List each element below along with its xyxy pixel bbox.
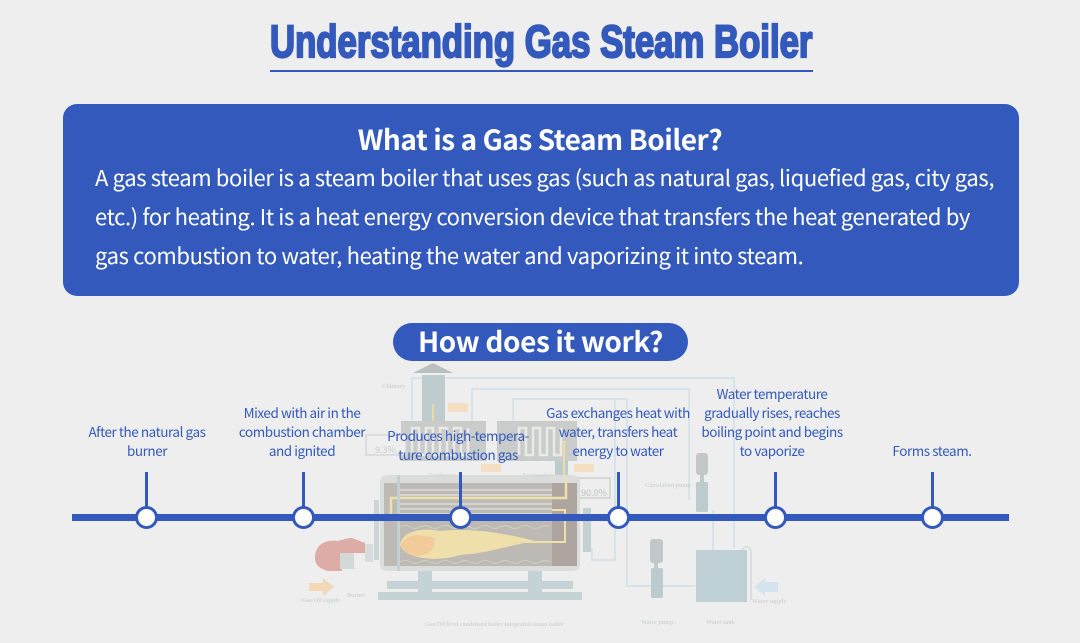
diagram captions: Water tank xyxy=(706,620,736,626)
chimney xyxy=(413,363,453,422)
boiler body xyxy=(374,475,591,571)
step 4 label: water, transfers heat xyxy=(559,421,677,441)
pumps xyxy=(650,453,708,598)
step 1 label xyxy=(88,421,206,460)
section heading pill: How does it work? xyxy=(418,321,663,361)
water tank xyxy=(696,547,751,602)
step 1 label: After the natural gas xyxy=(89,421,205,441)
step 1 label: burner xyxy=(127,440,167,460)
step 5 label: Water temperature xyxy=(717,383,827,403)
step 5 label: to vaporize xyxy=(740,440,804,460)
step 5 label xyxy=(701,383,843,460)
panel body text: etc.) for heating. It is a heat energy conversion device that transfers the heat generated by xyxy=(95,200,970,232)
panel body text: gas combustion to water, heating the water and vaporizing it into steam. xyxy=(95,239,803,271)
diagram captions: Condenser xyxy=(428,473,456,479)
step 4 label xyxy=(546,402,690,460)
step 4 label: Gas exchanges heat with xyxy=(546,402,690,422)
diagram captions: Chimney xyxy=(382,384,405,390)
readout boxes xyxy=(366,435,610,499)
water supply arrow xyxy=(754,578,778,596)
diagram captions: Economizer xyxy=(523,473,554,479)
diagram captions: Water supply xyxy=(752,599,786,605)
gas supply arrow xyxy=(309,578,334,596)
diagram captions: Water pump xyxy=(641,620,674,626)
panel body text: A gas steam boiler is a steam boiler that uses gas (such as natural gas, liquefied gas, city gas, xyxy=(95,161,994,193)
step 2 label xyxy=(239,402,366,460)
step 5 label: gradually rises, reaches xyxy=(704,402,840,422)
step 4 label: energy to water xyxy=(572,440,664,460)
title: Understanding Gas Steam Boiler xyxy=(270,16,812,67)
diagram captions: Gas/Oil supply xyxy=(302,598,340,604)
step 2 label: and ignited xyxy=(269,440,335,460)
panel: what is a gas steam boiler xyxy=(63,104,1019,296)
burner xyxy=(315,538,373,571)
step 2 label: Mixed with air in the xyxy=(244,402,360,422)
diagram captions: Burner xyxy=(347,593,366,599)
readout boxes: 90.0% xyxy=(581,486,607,499)
diagram captions: Gas/Oil fired condensed boiler integrated steam boiler xyxy=(425,622,564,628)
readout boxes: 9.3% xyxy=(375,443,396,456)
step 6 label: Forms steam. xyxy=(892,440,972,460)
panel heading: What is a Gas Steam Boiler? xyxy=(358,119,722,159)
step 3 label: Produces high-tempera- xyxy=(387,425,529,445)
panel body text xyxy=(95,161,994,271)
step 2 label: combustion chamber xyxy=(239,421,365,441)
step 3 label: ture combustion gas xyxy=(398,444,518,464)
diagram captions: Circulation pump xyxy=(645,483,691,489)
diagram captions xyxy=(302,384,786,628)
step 5 label: boiling point and begins xyxy=(701,421,843,441)
step 3 label xyxy=(387,425,529,464)
condenser and economizer xyxy=(401,403,594,498)
boiler base xyxy=(378,571,582,600)
